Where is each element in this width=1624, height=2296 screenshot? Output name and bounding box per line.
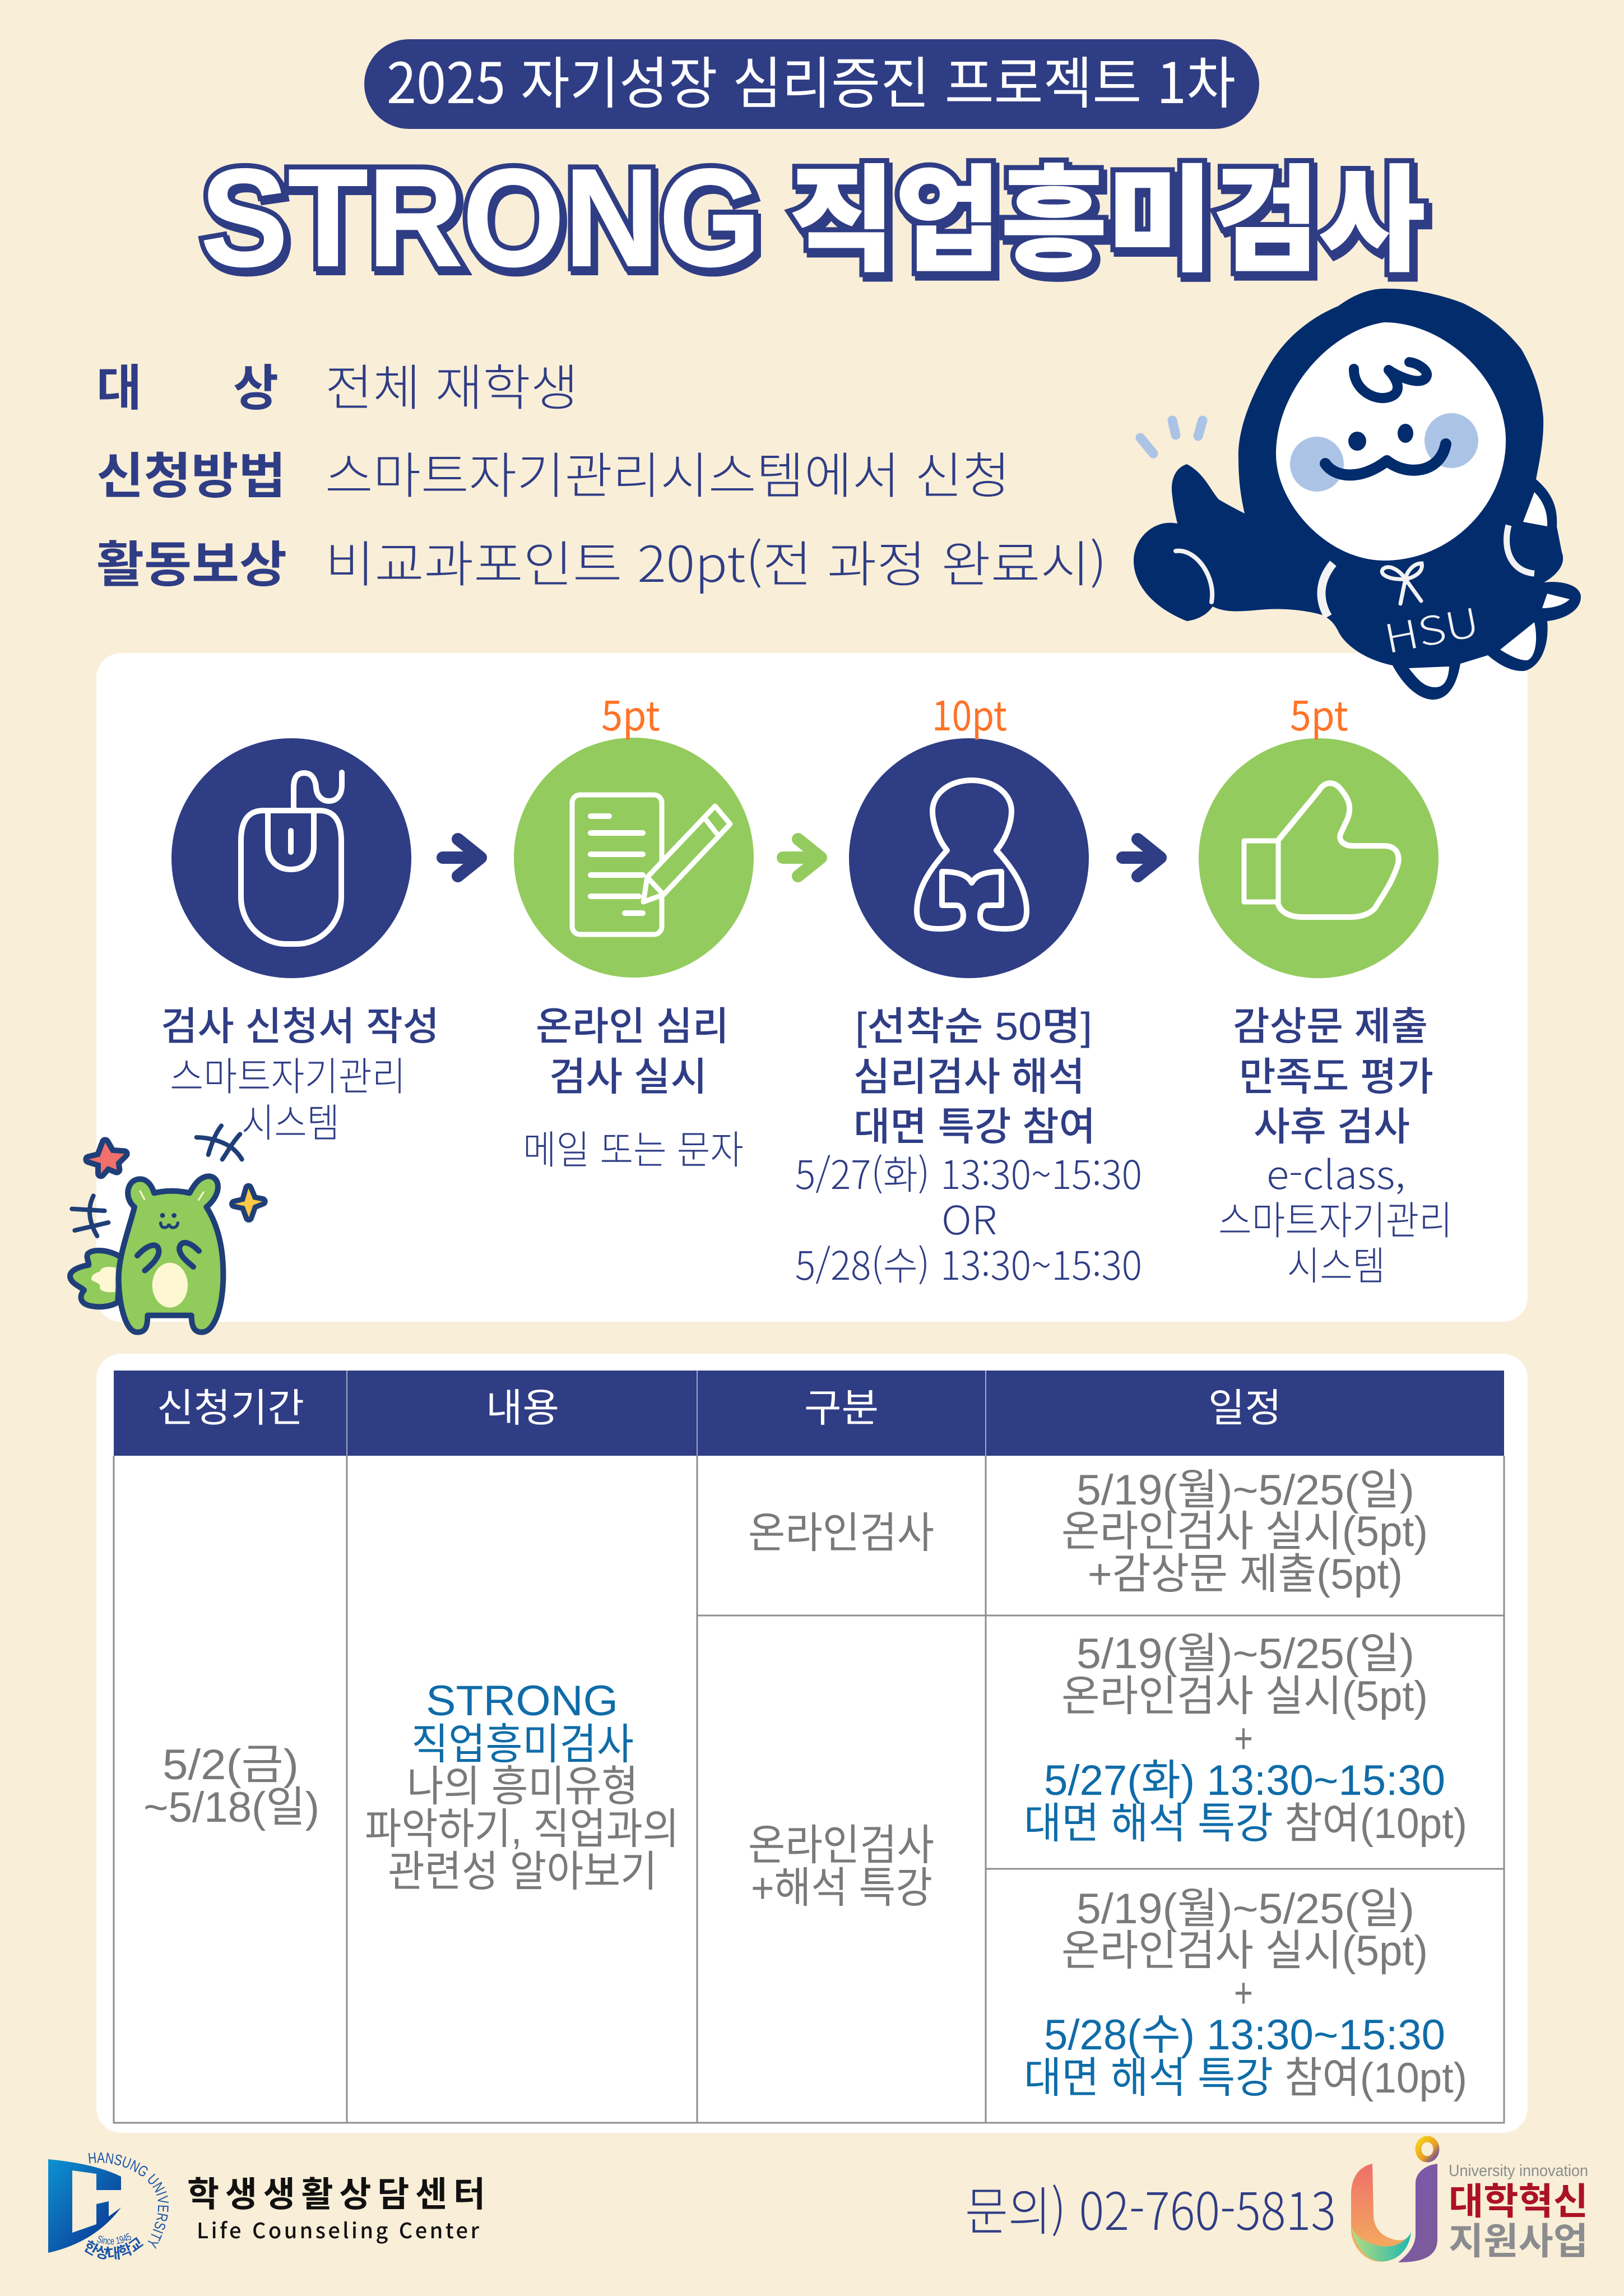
step 3: reader icon circle	[849, 738, 1089, 978]
step 4 text: 스마트자기관리	[1218, 1189, 1453, 1246]
schedule row 1: 5/19(월)~5/25(일)	[1077, 1466, 1414, 1514]
counseling center name: Life Counseling Center	[197, 2214, 479, 2244]
schedule row 3: 5/19(월)~5/25(일)	[1077, 1885, 1414, 1933]
step 3 text: [선착순 50명]	[855, 1004, 1092, 1048]
Hansung University logo: HANSUNG UNIVERSITY ·	[89, 2152, 169, 2249]
title: STRONG	[203, 144, 764, 299]
step 1: mouse icon circle	[171, 738, 411, 978]
university innovation logo	[1351, 2139, 1588, 2262]
schedule row 3: +	[1234, 1969, 1253, 2017]
table header row: 구분	[804, 1386, 879, 1430]
panel: process steps	[96, 653, 1528, 1322]
category: online test: 온라인검사	[748, 1510, 934, 1557]
step 2 text	[523, 1004, 744, 1175]
schedule row 2: 온라인검사 실시(5pt)	[1061, 1673, 1428, 1720]
university innovation logo: 대학혁신	[1449, 2181, 1588, 2222]
content description: STRONG	[426, 1677, 618, 1725]
arrow 1	[443, 839, 481, 876]
schedule row 2: 대면 해석 특강 참여(10pt)	[1024, 1800, 1467, 1848]
content description: 관련성 알아보기	[388, 1848, 657, 1896]
title: STRONG	[201, 140, 761, 295]
schedule row 2	[1024, 1630, 1467, 1848]
title: 직업흥미검사	[789, 157, 1425, 285]
step 3 text: OR	[941, 1189, 997, 1246]
category: online test plus lecture	[748, 1822, 934, 1912]
schedule row 2: +	[1234, 1715, 1253, 1762]
schedule row 2: 5/27(화) 13:30~15:30	[1044, 1757, 1445, 1804]
schedule table	[114, 1371, 1504, 2123]
step 3 text	[795, 1004, 1142, 1292]
step 2 text: 메일 또는 문자	[523, 1119, 744, 1175]
info block: target, method, reward: 활동보상	[96, 537, 287, 592]
frog mascot with stars	[70, 1126, 262, 1332]
arrow 2	[783, 839, 821, 876]
step 3 text: 대면 특강 참여	[853, 1105, 1096, 1149]
step 1 text: 검사 신청서 작성	[161, 1004, 439, 1048]
step 4 text: 시스템	[1287, 1235, 1385, 1292]
application period: 5/2(금)	[163, 1741, 299, 1789]
step 4 text: 만족도 평가	[1239, 1055, 1433, 1099]
header pill: project name: 2025 자기성장 심리증진 프로젝트 1차	[387, 38, 1236, 119]
content description: 파악하기, 직업과의	[365, 1806, 679, 1853]
step 2: document and pencil icon circle	[514, 738, 754, 978]
step 3 text: 5/28(수) 13:30~15:30	[795, 1235, 1142, 1292]
step 1 text	[161, 1004, 439, 1149]
contact number: 문의) 02-760-5813	[965, 2170, 1336, 2245]
info block: target, method, reward	[96, 349, 1107, 596]
arrow 3	[1122, 839, 1161, 876]
panel: schedule table background	[96, 1354, 1528, 2133]
content description: 나의 흥미유형	[407, 1763, 638, 1811]
step 3 text: 심리검사 해석	[853, 1055, 1085, 1099]
Hansung University logo: 한성대학교	[84, 2237, 143, 2260]
content description	[365, 1677, 679, 1896]
category: online test plus lecture: +해석 특강	[751, 1864, 932, 1912]
Hansung University logo	[48, 2152, 169, 2260]
table header row: 신청기간	[157, 1386, 304, 1430]
step 3 text: 5/27(화) 13:30~15:30	[795, 1144, 1142, 1201]
points label step 2: 5pt	[601, 683, 660, 742]
schedule row 3: 대면 해석 특강 참여(10pt)	[1024, 2054, 1467, 2102]
step 2 text: 검사 실시	[549, 1055, 707, 1099]
application period	[143, 1741, 319, 1831]
title: 직업흥미검사	[792, 161, 1428, 290]
step 2 text: 온라인 심리	[536, 1004, 729, 1048]
schedule row 3	[1024, 1885, 1467, 2102]
schedule row 1: +감상문 제출(5pt)	[1088, 1550, 1403, 1598]
mascot: navy character with thumb up: HSU	[1379, 591, 1483, 665]
title: STRONG	[201, 140, 761, 295]
schedule row 3: 온라인검사 실시(5pt)	[1061, 1927, 1428, 1975]
title	[201, 140, 1428, 299]
table header row: 일정	[1208, 1386, 1282, 1430]
counseling center name	[187, 2175, 485, 2244]
step 1 text: 스마트자기관리	[170, 1045, 406, 1102]
schedule row 1	[1061, 1466, 1428, 1598]
step 4: thumbs up icon circle	[1199, 738, 1439, 978]
counseling center name: 학생생활상담센터	[187, 2175, 485, 2214]
info block: target, method, reward: 신청방법	[96, 448, 286, 504]
step 4 text	[1218, 1004, 1453, 1292]
info block: target, method, reward: 대 상	[96, 360, 279, 416]
schedule row 2: 5/19(월)~5/25(일)	[1077, 1630, 1414, 1678]
step 4 text: 사후 검사	[1254, 1105, 1410, 1149]
table header row	[114, 1371, 1504, 1456]
title: 직업흥미검사	[789, 157, 1425, 285]
content description: 직업흥미검사	[411, 1721, 634, 1769]
info block: target, method, reward: 스마트자기관리시스템에서 신청	[325, 437, 1010, 508]
schedule row 1: 온라인검사 실시(5pt)	[1061, 1508, 1428, 1556]
step 1 text: 시스템	[242, 1092, 340, 1149]
info block: target, method, reward: 전체 재학생	[325, 349, 578, 420]
points label step 3: 10pt	[932, 683, 1007, 742]
university innovation logo: 지원사업	[1449, 2220, 1588, 2262]
table grid lines	[114, 1456, 1504, 2123]
info block: target, method, reward: 비교과포인트 20pt(전 과정 완료시)	[325, 525, 1107, 596]
application period: ~5/18(일)	[143, 1784, 319, 1831]
step 4 text: 감상문 제출	[1233, 1004, 1428, 1048]
category: online test plus lecture: 온라인검사	[748, 1822, 934, 1869]
university innovation logo: University innovation	[1449, 2162, 1588, 2180]
table header row: 내용	[486, 1386, 559, 1430]
Hansung University logo: Since 1945	[98, 2233, 131, 2244]
step 4 text: e-class,	[1266, 1144, 1405, 1201]
mascot: navy character with thumb up	[1134, 289, 1581, 700]
points label step 4: 5pt	[1290, 683, 1348, 742]
schedule row 3: 5/28(수) 13:30~15:30	[1044, 2011, 1445, 2059]
